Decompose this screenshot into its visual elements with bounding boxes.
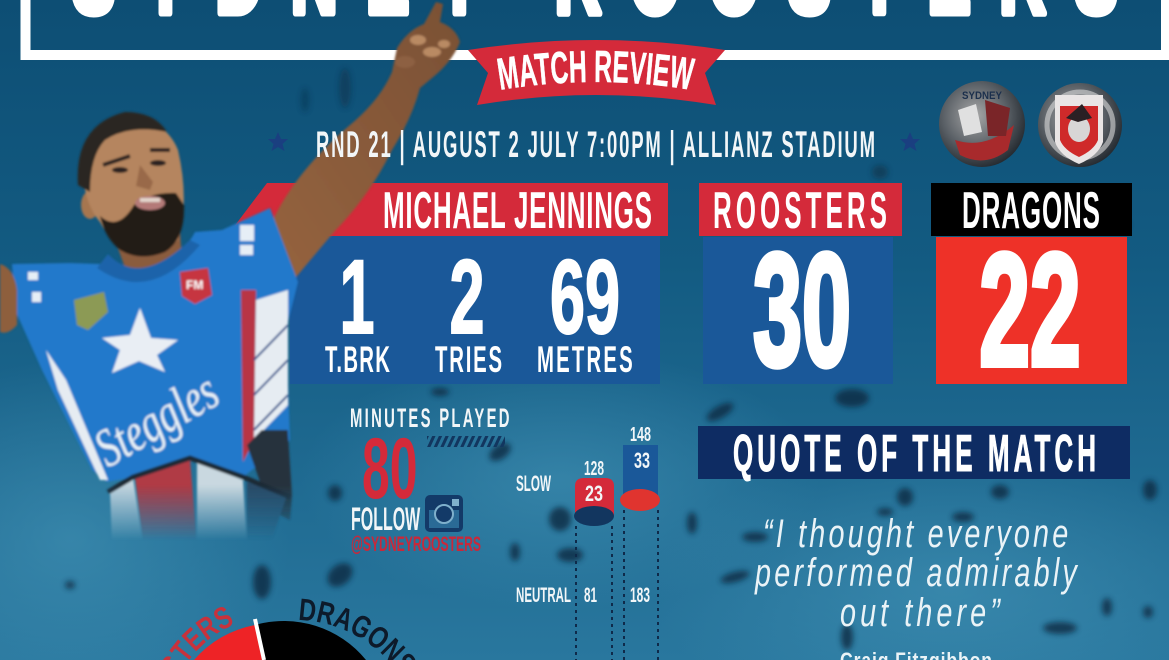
roosters score panel bbox=[699, 181, 902, 400]
follow label: FOLLOW bbox=[351, 502, 420, 538]
dragons cylinder: 33 bbox=[634, 448, 650, 473]
roosters cylinder: 23 bbox=[585, 481, 603, 506]
dragons score panel bbox=[931, 181, 1132, 399]
banner text: MATCH REVIEW bbox=[496, 50, 696, 90]
roosters half bbox=[194, 625, 262, 660]
stat: metres: METRES bbox=[537, 340, 633, 381]
quote text bbox=[754, 511, 1079, 660]
match details: RND 21 | AUGUST 2 JULY 7:00PM | ALLIANZ STADIUM bbox=[316, 125, 875, 166]
roosters cylinder bbox=[574, 458, 614, 526]
sponsor logo: Steggles bbox=[84, 360, 228, 478]
quote heading: QUOTE OF THE MATCH bbox=[733, 424, 1096, 482]
dragons logo bbox=[1038, 83, 1122, 167]
stat: try breaks: T.BRK bbox=[325, 340, 390, 381]
dragons cylinder: 148 bbox=[630, 424, 651, 446]
neutral row: 81 bbox=[584, 584, 597, 607]
side stripe bbox=[46, 350, 108, 480]
name bar: MICHAEL JENNINGS bbox=[383, 181, 652, 239]
jersey bbox=[12, 208, 298, 482]
quote text: “I thought everyone bbox=[763, 511, 1068, 556]
icon: instagram bbox=[425, 495, 463, 532]
head bbox=[78, 112, 184, 257]
star left bbox=[268, 132, 288, 151]
quote of the match bbox=[698, 424, 1130, 660]
roosters cylinder: 128 bbox=[584, 458, 604, 480]
quote text: out there” bbox=[840, 590, 1001, 635]
dragons score: 22 bbox=[979, 220, 1081, 399]
stat: try breaks: 1 bbox=[339, 240, 375, 356]
minutes heading: MINUTES PLAYED bbox=[350, 402, 510, 433]
minutes played block bbox=[350, 402, 510, 556]
dragons label bbox=[931, 181, 1132, 239]
jersey star bbox=[102, 308, 178, 373]
stat: tries: 2 bbox=[449, 240, 485, 356]
stat: tries bbox=[435, 240, 502, 381]
instagram handle: @SYDNEYROOSTERS bbox=[351, 533, 481, 556]
dragons label: DRAGONS bbox=[962, 181, 1100, 239]
stat: metres bbox=[537, 240, 633, 381]
quote text: performed admirably bbox=[754, 550, 1079, 595]
dragons half bbox=[255, 621, 366, 660]
left arm bbox=[0, 264, 17, 333]
sleeve stripes bbox=[241, 290, 256, 462]
roosters logo bbox=[939, 81, 1025, 167]
hand knuckles bbox=[395, 35, 450, 68]
header frame with title bbox=[26, 0, 1166, 55]
dotted guides bbox=[576, 510, 658, 660]
collar bbox=[97, 240, 200, 282]
star right bbox=[900, 132, 920, 151]
player stats panel bbox=[227, 181, 668, 384]
roosters score: 30 bbox=[753, 221, 851, 400]
stat: tries: TRIES bbox=[435, 340, 502, 381]
roosters logo: SYDNEY bbox=[962, 90, 1003, 102]
player photo bbox=[0, 2, 460, 545]
shorts bbox=[106, 428, 294, 536]
shoulder marks bbox=[28, 225, 254, 302]
raised arm bbox=[270, 2, 460, 282]
dragons cylinder bbox=[620, 424, 660, 511]
hatch decoration bbox=[427, 436, 505, 447]
match info line bbox=[268, 125, 920, 166]
club badge bbox=[180, 268, 212, 304]
neutral row: NEUTRAL bbox=[516, 584, 571, 607]
possession donut bbox=[163, 598, 416, 660]
neutral row: 183 bbox=[630, 584, 650, 607]
minutes value: 80 bbox=[362, 420, 417, 516]
name bar bbox=[227, 181, 668, 239]
competition badge bbox=[74, 292, 108, 330]
neck bbox=[112, 230, 182, 277]
possession chart bbox=[516, 424, 660, 660]
stat: try breaks bbox=[325, 240, 390, 381]
roosters label: ROOSTERS bbox=[713, 181, 887, 239]
team logos bbox=[939, 81, 1122, 167]
club badge: FM bbox=[186, 278, 203, 292]
slow row label: SLOW bbox=[516, 471, 551, 496]
match review banner bbox=[468, 40, 725, 105]
stat: metres: 69 bbox=[550, 240, 620, 356]
